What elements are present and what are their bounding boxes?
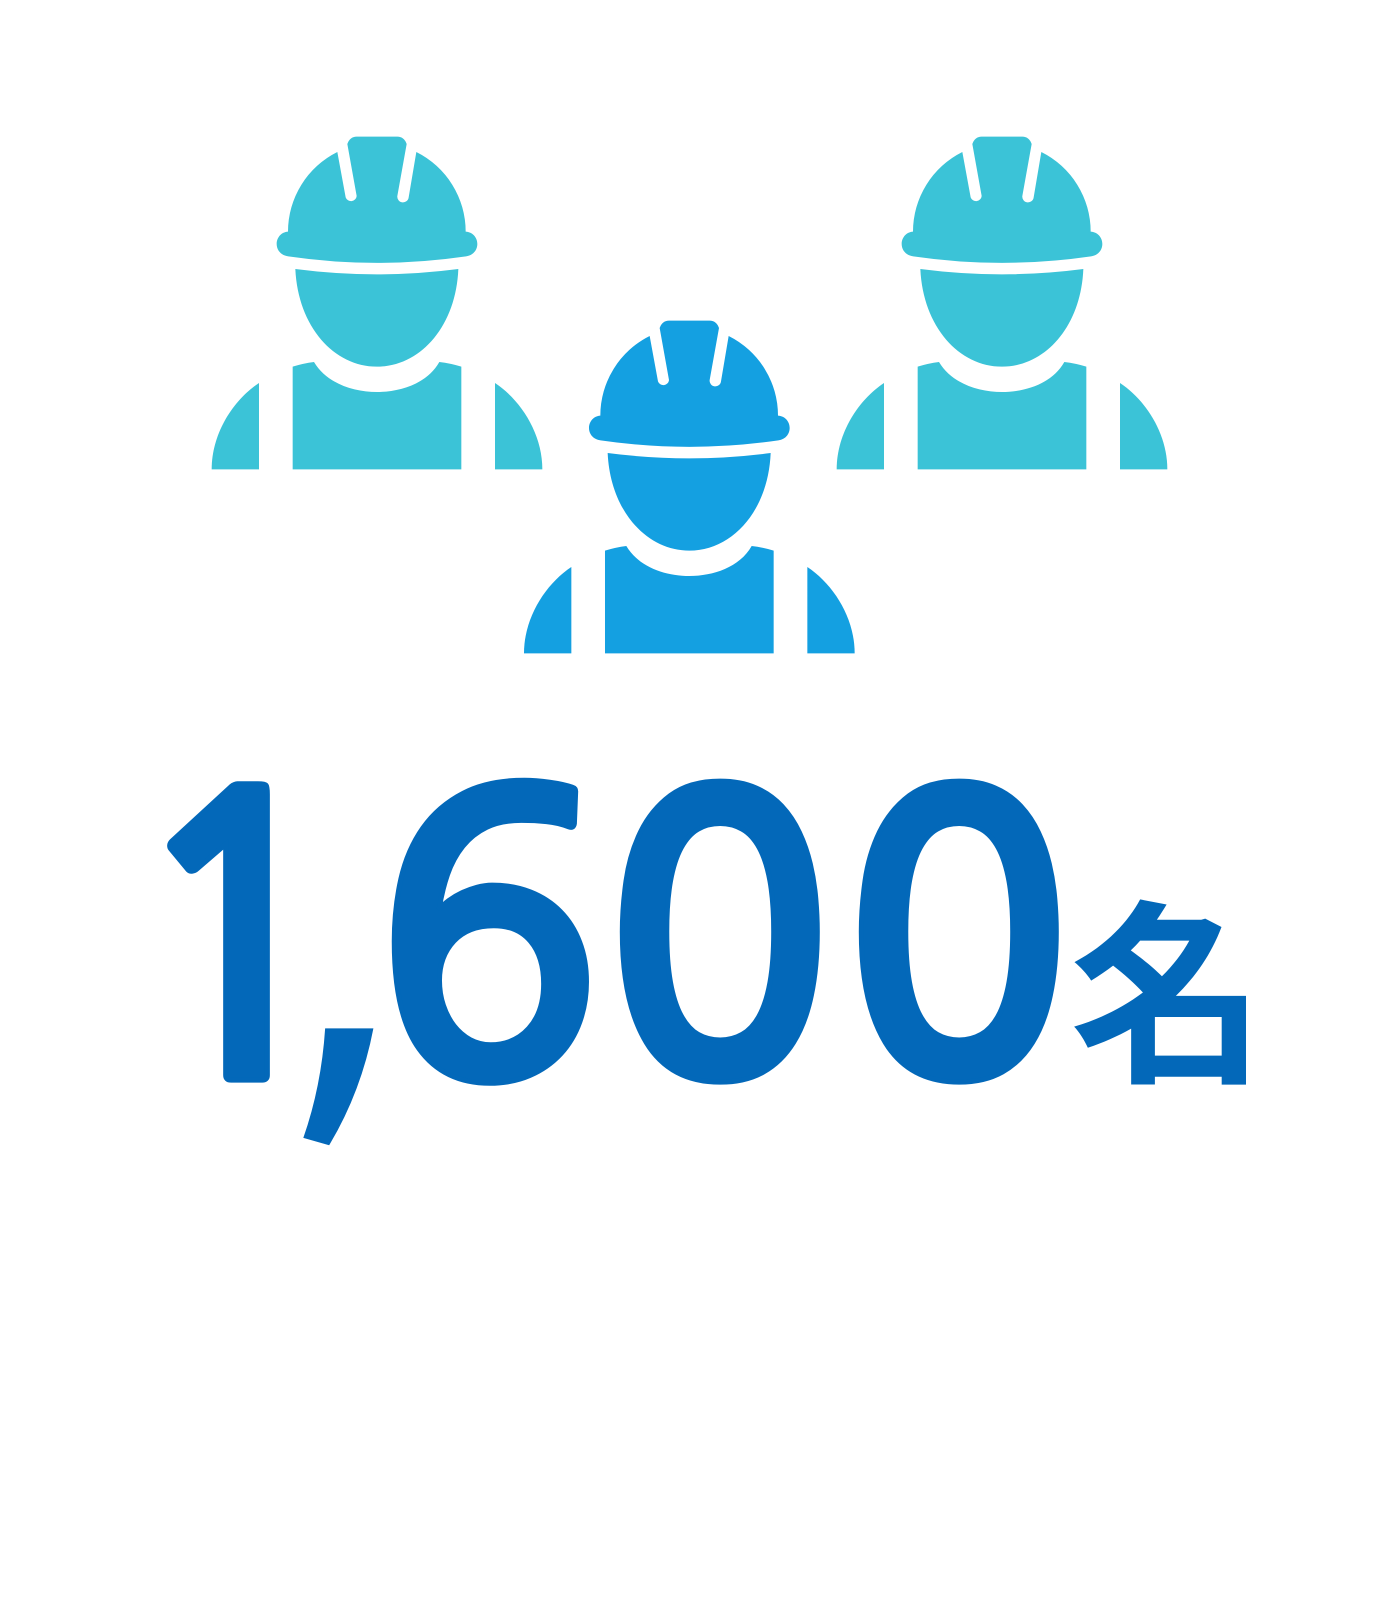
headline number: , [280,738,484,1149]
icon: worker right [837,137,1167,469]
unit label: 名 [1070,890,1266,1109]
icon: worker center [524,321,855,653]
headline number: 600 [370,752,1076,1138]
headline number: 1 [120,752,356,1138]
icon: worker left [212,137,542,469]
